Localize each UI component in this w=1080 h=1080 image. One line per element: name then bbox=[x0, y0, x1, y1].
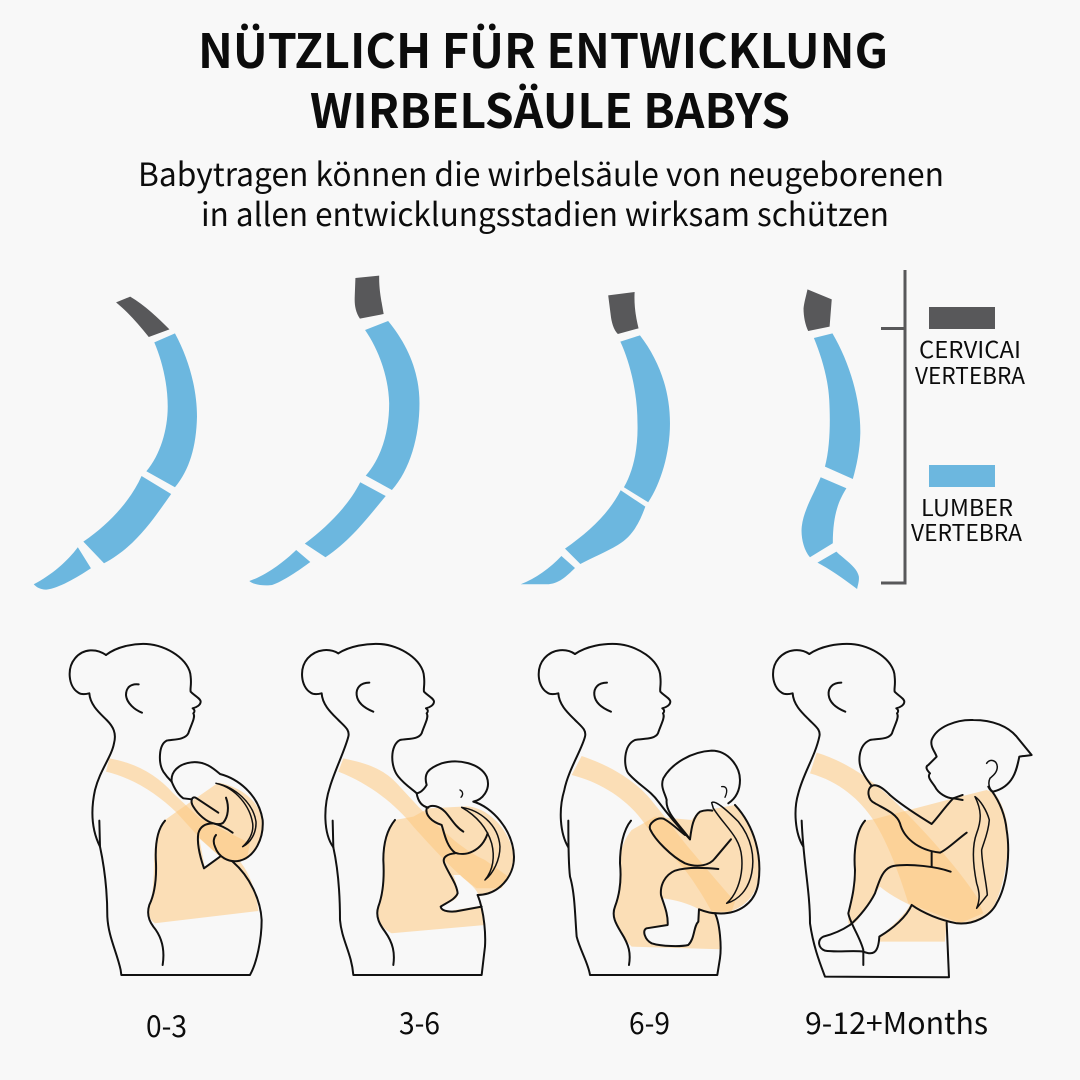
legend: cervical vertebra bbox=[915, 307, 1025, 391]
age label 3-6: 3-6 bbox=[399, 999, 440, 1043]
legend: lumber vertebra: VERTEBRA bbox=[911, 514, 1022, 548]
legend: lumber vertebra bbox=[911, 465, 1022, 548]
legend: lumber vertebra: LUMBER bbox=[921, 489, 1013, 523]
spine diagram 6-9 months bbox=[521, 292, 670, 584]
figure: mother with baby 6-9 months bbox=[539, 644, 760, 975]
age label 0-3: 0-3 bbox=[146, 1002, 187, 1046]
figure: mother with baby 9-12 months bbox=[773, 644, 1032, 977]
figure: mother with baby 3-6 months bbox=[302, 644, 514, 975]
spine diagram 0-3 months bbox=[34, 297, 197, 590]
title bbox=[198, 13, 888, 142]
age label 6-9: 6-9 bbox=[629, 999, 670, 1043]
legend: cervical vertebra: CERVICAI bbox=[919, 331, 1021, 365]
legend: cervical vertebra: VERTEBRA bbox=[915, 357, 1025, 391]
subtitle: in allen entwicklungsstadien wirksam schützen bbox=[201, 190, 889, 236]
spine diagram 3-6 months bbox=[249, 276, 419, 585]
spine diagram 9-12 months bbox=[802, 289, 860, 589]
subtitle: Babytragen können die wirbelsäule von neugeborenen bbox=[138, 150, 944, 196]
legend bracket bbox=[881, 270, 905, 583]
subtitle bbox=[138, 150, 944, 236]
figure: mother with baby 0-3 months bbox=[70, 644, 263, 975]
title: NÜTZLICH FÜR ENTWICKLUNG bbox=[198, 13, 888, 82]
title: WIRBELSÄULE BABYS bbox=[310, 73, 790, 142]
age label 9-12+Months: 9-12+Months bbox=[805, 999, 988, 1043]
